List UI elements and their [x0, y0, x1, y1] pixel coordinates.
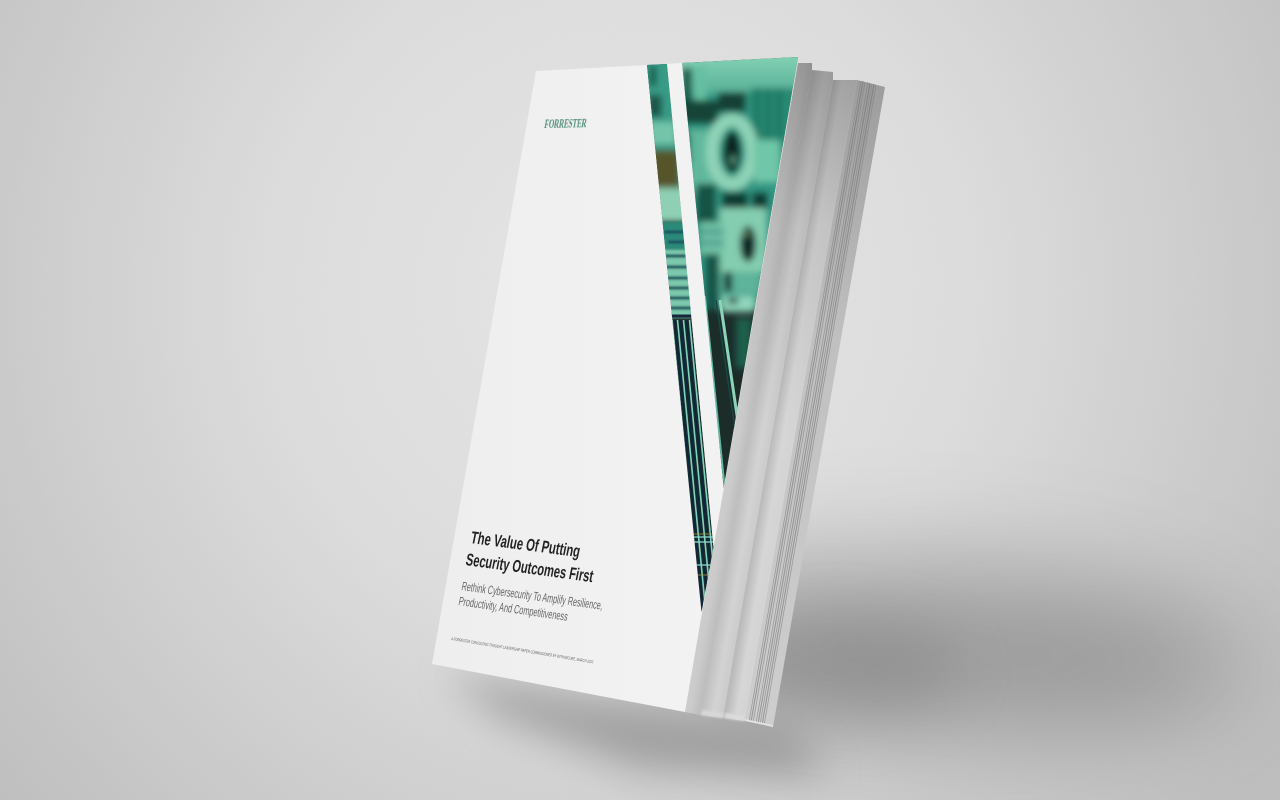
- Forrester logo: FORRESTER: [543, 116, 588, 131]
- front cover: [432, 45, 815, 712]
- book: [432, 45, 885, 727]
- report title: Security Outcomes First: [464, 549, 595, 586]
- report subtitle: [457, 579, 604, 624]
- report title: [464, 527, 595, 586]
- white diagonal stripe accent: [667, 63, 724, 547]
- circuit image: right panel: [682, 57, 798, 488]
- circuit image: left strip: [647, 64, 714, 612]
- page layer one: [685, 63, 812, 715]
- report title: The Value Of Putting: [469, 527, 582, 561]
- page layer two: [700, 70, 833, 718]
- commissioning note: A FORRESTER CONSULTING THOUGHT LEADERSHIP PAPER COMMISSIONED BY WITHSECURE, MARCH 2023: [451, 636, 594, 664]
- page layer three: [723, 80, 857, 721]
- report subtitle: Productivity, And Competitiveness: [457, 594, 569, 624]
- page block edge: [745, 80, 885, 727]
- report subtitle: Rethink Cybersecurity To Amplify Resilience,: [460, 579, 604, 613]
- cast shadow: [445, 548, 1254, 775]
